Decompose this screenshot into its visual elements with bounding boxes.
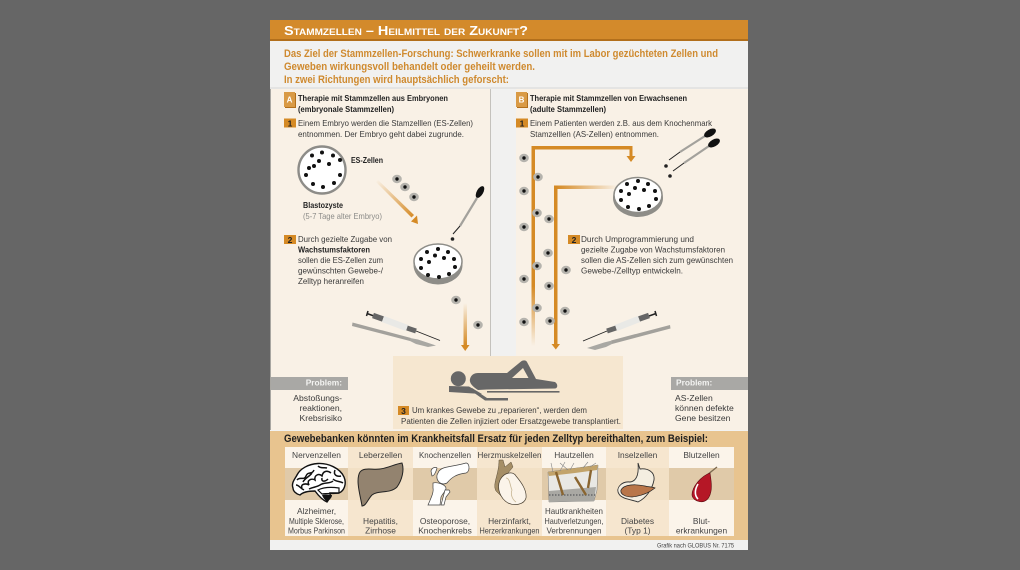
icon: syringe and scalpel A (352, 311, 440, 347)
callout: problem B (671, 377, 748, 423)
arrow: ES cells to dish (376, 180, 418, 224)
intro text: Geweben wirkungsvoll behandelt oder geheilt werden. (284, 61, 535, 73)
icon: brain (292, 463, 345, 502)
intro text: Das Ziel der Stammzellen-Forschung: Schwerkranke sollen mit im Labor gezüchteten Zellen und (284, 48, 718, 60)
panel B heading: Therapie mit Stammzellen von Erwachsenen (530, 93, 687, 103)
step B1 text: 1 (520, 118, 525, 128)
panel A heading: A (287, 96, 293, 104)
step A2 text: sollen die ES-Zellen zum (298, 255, 383, 265)
step 3 text (398, 405, 621, 426)
column: Leberzellen (358, 450, 403, 536)
callout: problem B: Gene besitzen (675, 413, 731, 423)
panel: therapy B background (516, 89, 748, 431)
column: Hautzellen: Verbrennungen (546, 526, 602, 536)
column: Nervenzellen: Nervenzellen (292, 450, 341, 460)
panel: therapy A background (271, 89, 490, 431)
step B2 text: 2 (572, 235, 577, 245)
column: Nervenzellen (288, 450, 345, 536)
icon: culture dish B (613, 178, 663, 217)
icon: syringe and scalpel B (583, 311, 670, 350)
icon: liver (358, 463, 403, 506)
intro text (270, 41, 748, 88)
column: Inselzellen: (Typ 1) (624, 526, 651, 536)
icon: skin section (548, 462, 598, 502)
icon: culture dish A (414, 244, 462, 284)
step A2 text: Durch gezielte Zugabe von (298, 234, 392, 244)
column: Nervenzellen: Alzheimer, (297, 506, 336, 516)
column: Herzmuskelzellen (478, 450, 542, 536)
column: Knochenzellen: Knochenzellen (419, 450, 471, 460)
step 3 text: Um krankes Gewebe zu „reparieren“, werden dem (412, 405, 587, 415)
step A1 text: 1 (288, 118, 293, 128)
callout: problem A: Problem: (306, 378, 342, 388)
label: ES-Zellen: ES-Zellen (351, 155, 383, 165)
icon: patient lying (449, 360, 560, 400)
step B2 text: gezielte Zugabe von Wachstumsfaktoren (581, 244, 725, 254)
AS cells (519, 154, 571, 326)
column: Blutzellen (676, 450, 727, 536)
column: Nervenzellen: Morbus Parkinson (288, 526, 345, 536)
column: Inselzellen: Inselzellen (618, 450, 658, 460)
callout: problem B: können defekte (675, 403, 734, 413)
step A1 text: entnommen. Der Embryo geht dabei zugrunde. (298, 129, 464, 139)
label: Blastozyste: (5-7 Tage alter Embryo) (303, 211, 382, 221)
callout: problem B: Problem: (676, 378, 712, 388)
column: Hautzellen: Hautverletzungen, (544, 516, 604, 526)
column: Leberzellen: Leberzellen (359, 450, 402, 460)
callout: problem A: Abstoßungs- (293, 393, 342, 403)
icon: heart (495, 460, 526, 505)
column: Hautzellen: Hautkrankheiten (545, 506, 603, 516)
step B1 text: Einem Patienten werden z.B. aus dem Knochenmark (530, 118, 713, 128)
title banner: Stammzellen – Heilmittel der Zukunft? (284, 23, 528, 38)
column: Hautzellen: Hautzellen (554, 450, 594, 460)
step B2 text: sollen die AS-Zellen sich zum gewünschten (581, 255, 733, 265)
icon: stomach and pancreas (618, 463, 655, 502)
cell table background (285, 447, 734, 536)
step 3 text: Patienten die Zellen injiziert oder Ersatzgewebe transplantiert. (401, 416, 621, 426)
step B2 text: Durch Umprogrammierung und (581, 234, 694, 244)
tissue banks heading: Gewebebanken könnten im Krankheitsfall Ersatz für jeden Zelltyp bereithalten, zum Beispiel: (284, 433, 708, 445)
panel: tissue banks (270, 430, 748, 540)
arrow: B to dish (532, 146, 636, 346)
panel B heading: (adulte Stammzellen) (530, 104, 606, 114)
icon: pipettes B (664, 127, 721, 178)
callout: problem B: AS-Zellen (675, 393, 713, 403)
column: Knochenzellen (418, 450, 472, 536)
panel A heading: Therapie mit Stammzellen aus Embryonen (298, 93, 448, 103)
column: Leberzellen: Hepatitis, (363, 516, 398, 526)
label: Blastozyste: Blastozyste (303, 200, 343, 210)
icon: blastocyst (298, 146, 346, 194)
column: Leberzellen: Zirrhose (365, 526, 396, 536)
icon: blood drop (692, 467, 717, 502)
ES cells (392, 175, 419, 201)
step B2 text (568, 234, 733, 276)
label: Blastozyste (303, 200, 382, 221)
panel A heading: (embryonale Stammzellen) (298, 104, 394, 114)
step B1 text: Stamzelllen (AS-Zellen) entnommen. (530, 129, 659, 139)
panel B heading: B (519, 96, 525, 104)
callout: problem A: reaktionen, (299, 403, 342, 413)
step A1 text: Einem Embryo werden die Stamzelllen (ES-Zellen) (298, 118, 473, 128)
step A2 text: Wachstumsfaktoren (298, 244, 370, 254)
column: Herzmuskelzellen: Herzmuskelzellen (478, 450, 542, 460)
panel: patient treatment (393, 356, 623, 429)
icon: pipette A (451, 185, 486, 241)
column: Blutzellen: Blut- (693, 516, 710, 526)
arrow: A down to patient (461, 303, 470, 351)
footer credit: Grafik nach GLOBUS Nr. 7175 (657, 542, 734, 550)
column: Nervenzellen: Multiple Sklerose, (289, 516, 344, 526)
footer credit (270, 540, 748, 550)
column: Blutzellen: erkrankungen (676, 526, 727, 536)
step A2 text (284, 234, 392, 286)
step A2 text: gewünschten Gewebe-/ (298, 266, 384, 276)
step B2 text: Gewebe-/Zelltyp entwickeln. (581, 266, 683, 276)
title banner (270, 20, 748, 41)
column: Inselzellen: Diabetes (621, 516, 654, 526)
column: Herzmuskelzellen: Herzinfarkt, (488, 516, 531, 526)
callout: problem A: Krebsrisiko (299, 413, 342, 423)
step 3 text: 3 (401, 406, 406, 416)
column: Inselzellen (618, 450, 658, 536)
column: Blutzellen: Blutzellen (683, 450, 720, 460)
cells A lower (451, 296, 483, 329)
panel A heading (284, 92, 448, 114)
step B1 text (516, 118, 713, 139)
column: Hautzellen (544, 450, 604, 536)
intro text: In zwei Richtungen wird hauptsächlich geforscht: (284, 74, 509, 86)
step A1 text (284, 118, 473, 139)
callout: problem A (271, 377, 348, 423)
column: Knochenzellen: Knochenkrebs (418, 526, 472, 536)
step A2 text: 2 (288, 235, 293, 245)
panel B heading (516, 92, 687, 114)
icon: knee bones (428, 463, 469, 505)
page sheet (270, 20, 748, 550)
step A2 text: Zelltyp heranreifen (298, 276, 364, 286)
column: Herzmuskelzellen: Herzerkrankungen (480, 526, 540, 536)
arrow: B dish to patient (552, 186, 618, 350)
column: Knochenzellen: Osteoporose, (420, 516, 470, 526)
